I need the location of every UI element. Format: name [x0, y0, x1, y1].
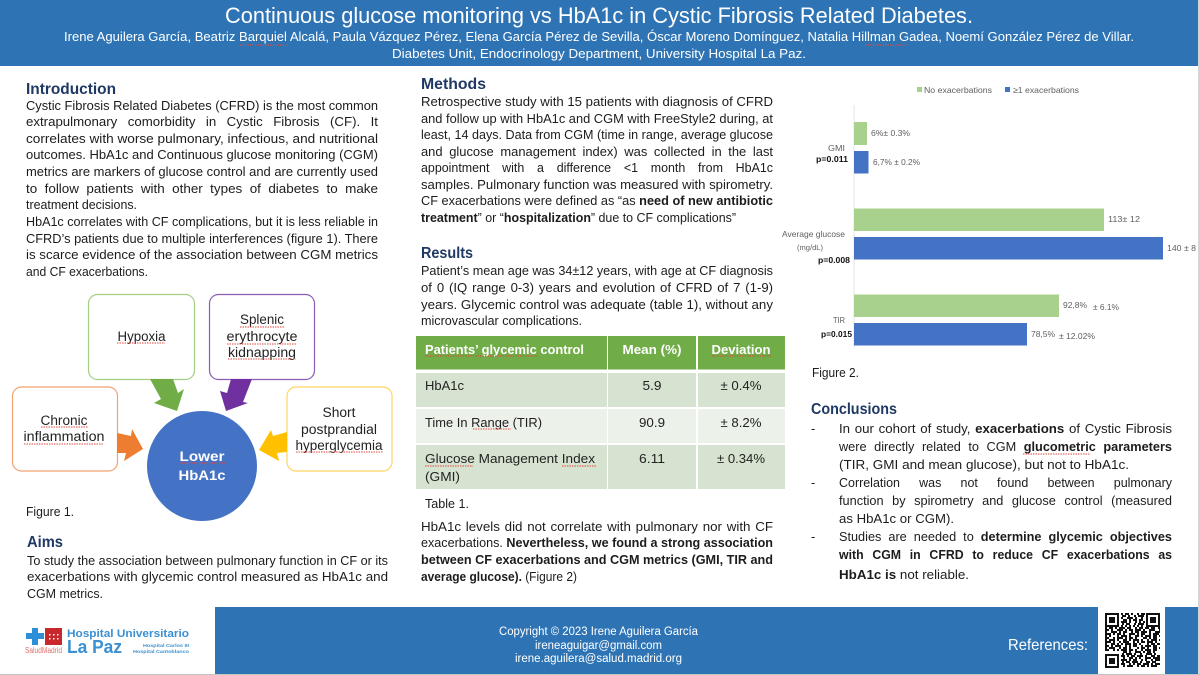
bars: TIR: p=0.015 [821, 329, 852, 339]
table 1: glycemic control: ± 8.2% [720, 415, 762, 430]
introduction text: metrics are markers of glucose control and are currently used [26, 165, 378, 179]
copyright and contact: ireneaguigar@gmail.com [535, 640, 662, 652]
arrow: purple [220, 379, 252, 411]
conclusion item 2: function by spirometry and glucose control (measured [839, 494, 1172, 508]
results text: microvascular complications. [421, 314, 582, 328]
box: chronic inflammation: Chronic [40, 413, 88, 428]
caption: figure 2: Figure 2. [812, 366, 859, 380]
methods text: samples. Pulmonary function was measured with spirometry. [421, 178, 773, 192]
box: hypoxia [88, 294, 194, 380]
introduction text: HbA1c correlates with CF complications, but it is less reliable in [26, 215, 378, 229]
introduction text: Cystic Fibrosis Related Diabetes (CFRD) is the most common [26, 99, 378, 113]
bars: TIR: TIR [833, 315, 845, 325]
figure 2: bar chart [782, 85, 1196, 380]
box: short postprandial hyperglycemia [287, 387, 392, 471]
box: short postprandial hyperglycemia: hyperglycemia [296, 438, 383, 453]
arrow: green [150, 379, 184, 411]
logo: Hospital Universitario La Paz: Hospital Cantoblanco [133, 649, 189, 654]
table 1: glycemic control: ± 0.4% [720, 378, 762, 393]
bars: GMI: GMI [828, 143, 845, 153]
title: Continuous glucose monitoring vs HbA1c in Cystic Fibrosis Related Diabetes. [225, 3, 973, 28]
methods text: least, 14 days. Data from CGM (time in range, average glucose [421, 128, 773, 142]
box: chronic inflammation [12, 387, 118, 471]
bars: average glucose: (mg/dL) [797, 245, 823, 252]
affiliation: Diabetes Unit, Endocrinology Department, University Hospital La Paz. [392, 46, 806, 61]
table 1: glycemic control: HbA1c [425, 378, 464, 393]
methods text: and follow up with HbA1c and CGM with FreeStyle2 during, at [421, 112, 773, 126]
table 1: glycemic control [416, 336, 785, 489]
results text: years. Glycemic control was adequate (table 1), without any [421, 298, 774, 312]
conclusion item 1: (TIR, GMI and mean glucose), but not to HbA1c. [839, 458, 1129, 472]
conclusion item 1: were directly related to CGM glucometric parameters [838, 440, 1172, 454]
box: splenic erythrocyte kidnapping: erythrocyte [226, 329, 298, 344]
table 1: glycemic control: 5.9 [642, 378, 662, 393]
circle: lower HbA1c: Lower [180, 449, 225, 464]
conclusion item 3: with CGM in CFRD to reduce CF exacerbations as [838, 548, 1172, 562]
bars: TIR [821, 294, 1119, 346]
introduction text: is scarce evidence of the association between CGM metrics [26, 248, 378, 262]
logo: Hospital Universitario La Paz: Hospital Universitario [67, 628, 189, 640]
figure 1: causes of lower HbA1c [12, 294, 392, 521]
conclusion item 2: Correlation was not found between pulmonary [839, 476, 1173, 490]
methods text: and glucose management index) was collected in the last [421, 145, 773, 159]
introduction text [26, 99, 378, 279]
methods text [421, 95, 774, 225]
caption: table 1: Table 1. [425, 497, 469, 511]
results conclusion text: exacerbations. Nevertheless, we found a strong association [421, 536, 773, 550]
bars: average glucose [782, 208, 1196, 265]
conclusion item 2 [811, 476, 1173, 526]
panel: introduction [26, 81, 378, 279]
table 1: glycemic control: Deviation [712, 342, 771, 357]
footer banner [215, 607, 1198, 674]
table 1: glycemic control: Glucose Management Index [425, 451, 596, 466]
heading: conclusions: Conclusions [811, 401, 897, 418]
circle: lower HbA1c: HbA1c [178, 468, 226, 483]
conclusion item 1 [811, 422, 1172, 472]
conclusion item 3: - [811, 530, 815, 544]
header banner [0, 0, 1198, 66]
box: splenic erythrocyte kidnapping: kidnapping [228, 345, 296, 360]
conclusion item 2: as HbA1c or CGM). [839, 512, 954, 526]
introduction text: treatment decisions. [26, 198, 137, 212]
heading: aims: Aims [27, 534, 63, 551]
panel: results [416, 245, 785, 584]
bars: TIR: 78,5% [1031, 329, 1055, 339]
bars: TIR: ± 12.02% [1059, 331, 1095, 341]
bars: average glucose: p=0.008 [818, 255, 850, 265]
bars: average glucose: 113± 12 [1108, 214, 1140, 224]
results conclusion text: between CF exacerbations and CGM metrics (GMI, TIR and [421, 553, 773, 567]
introduction text: correlates with worse pulmonary, infectious, and nutritional [26, 132, 378, 146]
conclusion item 1: In our cohort of study, exacerbations of Cystic Fibrosis [839, 422, 1172, 436]
table 1: glycemic control: Mean (%) [622, 342, 682, 357]
arrow: yellow [259, 430, 287, 461]
chart legend: No exacerbations [924, 85, 992, 95]
introduction text: to follow patients with other types of diabetes to make [26, 182, 378, 196]
logo: Hospital Universitario La Paz [25, 628, 189, 657]
methods text: treatment” or “hospitalization” due to CF complications” [421, 211, 736, 225]
chart legend: ≥1 exacerbations [1013, 85, 1079, 95]
bars: TIR: ± 6.1% [1093, 302, 1119, 312]
references label: References: [1008, 637, 1088, 654]
bars: average glucose: Average glucose [782, 229, 845, 239]
conclusion item 3: Studies are needed to determine glycemic objectives [839, 530, 1172, 544]
results text [421, 264, 774, 328]
conclusion item 3 [811, 530, 1172, 582]
results text: of 0 (IQ range 0-3) years and evolution of CFRD of 7 (1-9) [421, 281, 773, 295]
aims text: exacerbations with glycemic control measured as HbA1c and [27, 570, 388, 584]
results conclusion text [421, 520, 773, 584]
arrow: orange [117, 429, 143, 461]
panel: aims [27, 534, 388, 601]
conclusion item 3: HbA1c is not reliable. [839, 568, 969, 582]
aims text [27, 554, 388, 601]
logo: Hospital Universitario La Paz: Hospital Carlos III [143, 643, 189, 648]
table 1: glycemic control: (GMI) [425, 469, 460, 484]
bars: average glucose: 140 ± 8 [1167, 243, 1196, 253]
panel: methods [421, 76, 774, 225]
box: short postprandial hyperglycemia: postprandial [301, 422, 377, 437]
introduction text: extrapulmonary comorbidity in Cystic Fibrosis (CF). It [26, 115, 378, 129]
bars: GMI: p=0.011 [816, 154, 848, 164]
box: short postprandial hyperglycemia: Short [322, 405, 356, 420]
heading: methods: Methods [421, 76, 486, 93]
bars: GMI: 6%± 0.3% [871, 128, 910, 138]
introduction text: outcomes. HbA1c and Continuous glucose monitoring (CGM) [26, 148, 378, 162]
QR code [1098, 607, 1165, 674]
copyright and contact: Copyright © 2023 Irene Aguilera García [499, 626, 699, 638]
aims text: To study the association between pulmonary function in CF or its [27, 554, 388, 568]
table 1: glycemic control: 6.11 [639, 451, 665, 466]
methods text: Retrospective study with 15 patients with diagnosis of CFRD [421, 95, 773, 109]
heading: introduction: Introduction [26, 81, 116, 98]
caption: figure 1: Figure 1. [26, 505, 74, 519]
introduction text: and CF exacerbations. [26, 265, 148, 279]
table 1: glycemic control: Patients’ glycemic control [425, 342, 584, 357]
chart legend [917, 85, 1079, 95]
box: splenic erythrocyte kidnapping: Splenic [240, 312, 284, 327]
box: chronic inflammation: inflammation [24, 429, 104, 444]
table 1: glycemic control: 90.9 [639, 415, 665, 430]
aims text: CGM metrics. [27, 587, 103, 601]
methods text: CF exacerbations were defined as “as need of new antibiotic [421, 194, 773, 208]
logo: Hospital Universitario La Paz: SaludMadrid [25, 646, 62, 655]
results text: Patient’s mean age was 34±12 years, with age at CF diagnosis [421, 264, 773, 278]
bars: GMI: 6,7% ± 0.2% [873, 157, 920, 167]
table 1: glycemic control: ± 0.34% [717, 451, 765, 466]
box: splenic erythrocyte kidnapping [210, 294, 314, 380]
heading: results: Results [421, 245, 473, 262]
table 1: glycemic control: Time In Range (TIR) [425, 415, 542, 430]
bars: TIR: 92,8% [1063, 300, 1087, 310]
box: hypoxia: Hypoxia [118, 329, 166, 344]
results conclusion text: HbA1c levels did not correlate with pulmonary nor with CF [421, 520, 773, 534]
conclusion item 2: - [811, 476, 815, 490]
bars: GMI [816, 122, 920, 174]
copyright and contact: irene.aguilera@salud.madrid.org [515, 653, 682, 665]
copyright and contact [499, 626, 699, 665]
methods text: appointment with a difference <1 month from HbA1c [421, 161, 774, 175]
panel: conclusions [811, 401, 1173, 582]
circle: lower HbA1c [147, 411, 257, 521]
introduction text: CFRD’s patients due to multiple interferences (figure 1). There [26, 232, 378, 246]
authors: Irene Aguilera García, Beatriz Barquiel Alcalá, Paula Vázquez Pérez, Elena García Pérez de Sevilla, Óscar Moreno Domínguez, Natalia Hillman Gadea, Noemí González Pérez de Villar. [64, 29, 1134, 44]
logo: Hospital Universitario La Paz: La Paz [67, 637, 122, 657]
results conclusion text: average glucose). (Figure 2) [421, 570, 577, 584]
conclusion item 1: - [811, 422, 815, 436]
